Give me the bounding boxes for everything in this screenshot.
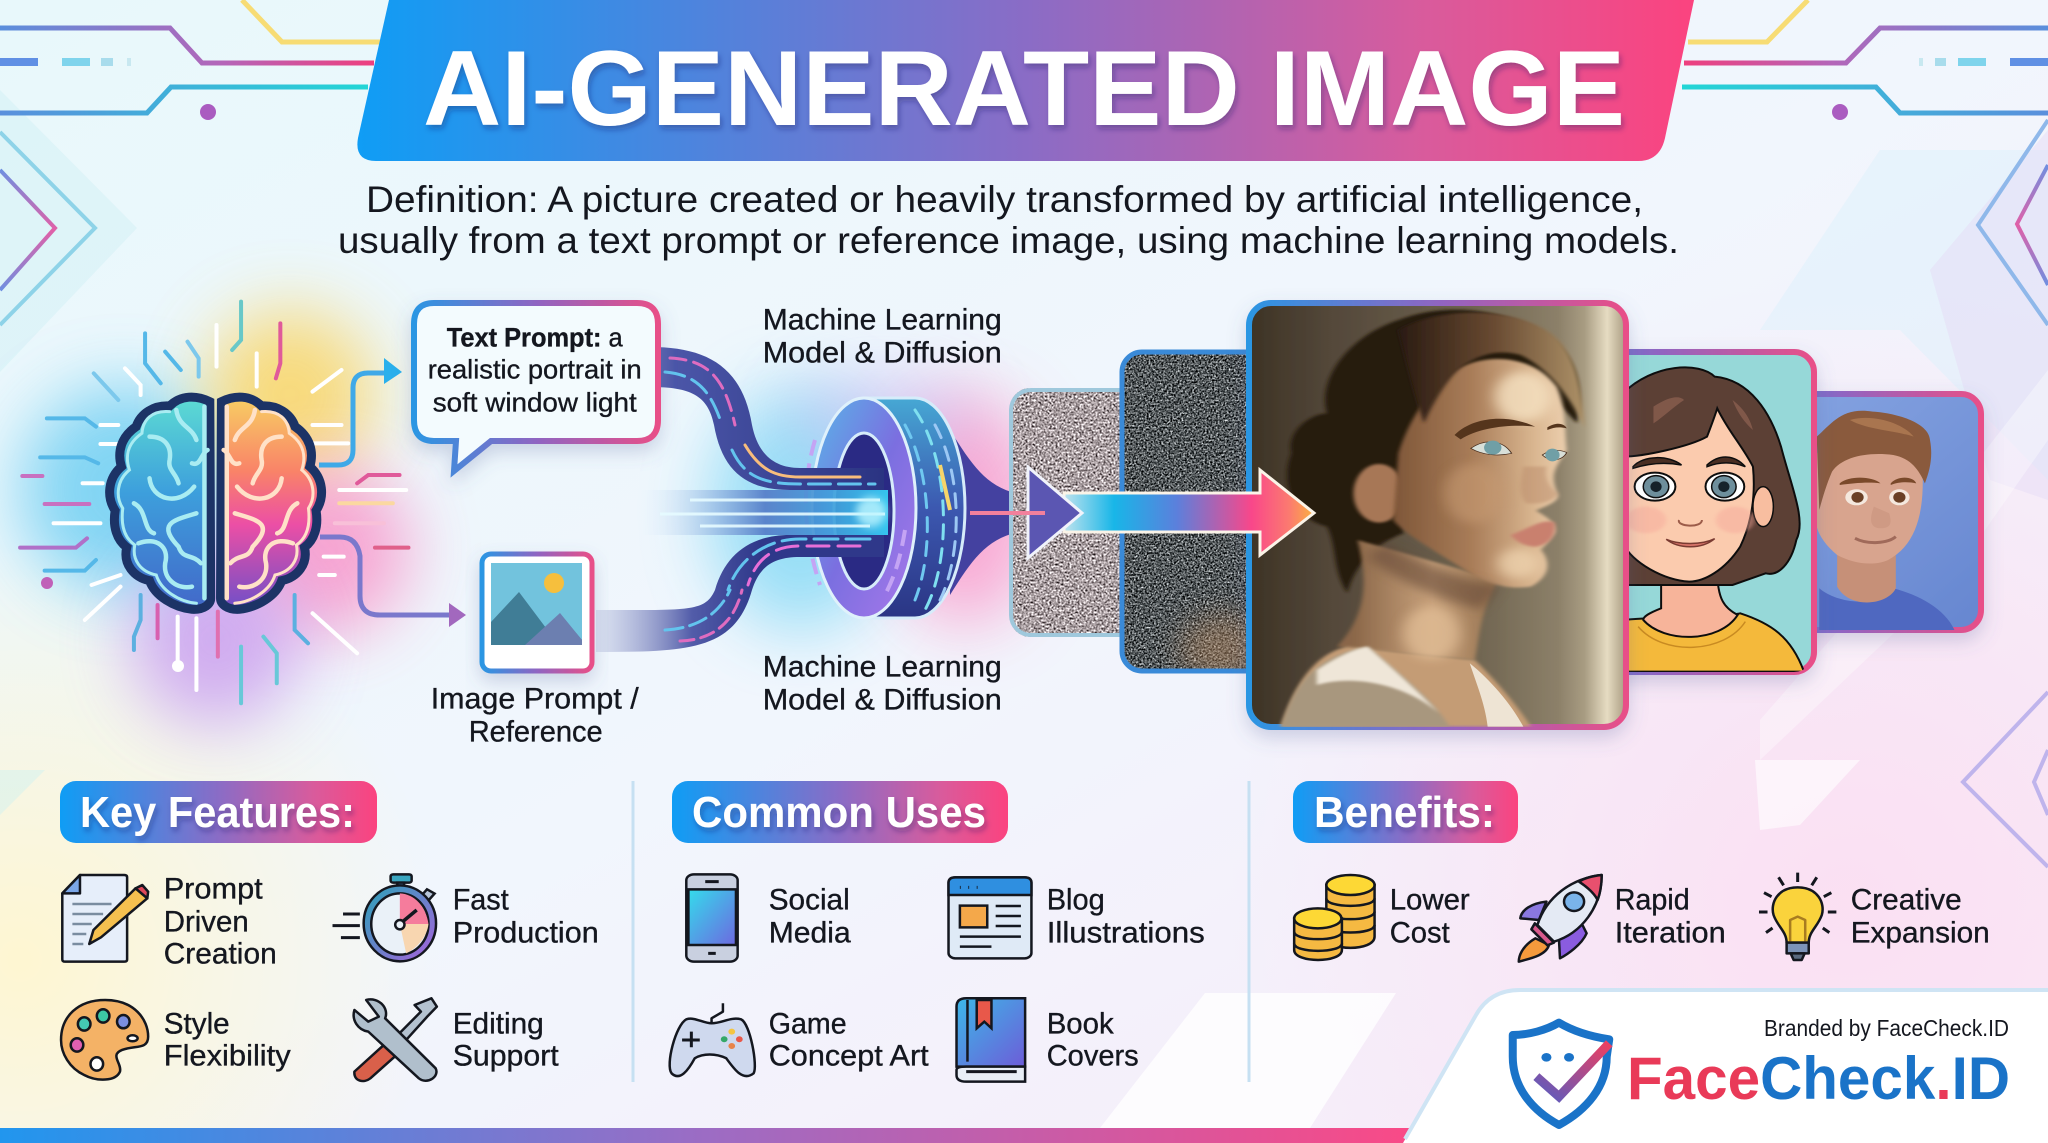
section divider one: [632, 781, 634, 1082]
text: prompt driven creation: Prompt: [164, 872, 263, 906]
text: social media: Social: [769, 884, 850, 916]
portrait chest: [1281, 647, 1531, 727]
top pipe: [650, 347, 884, 490]
branded by text: Branded by FaceCheck.ID: [1764, 1015, 2009, 1041]
text: editing support: Support: [453, 1040, 559, 1072]
arrow: brain to image prompt: [320, 537, 466, 627]
portrait front hair: [1398, 313, 1585, 428]
text: blog illustrations: Blog: [1047, 884, 1105, 916]
noise panel, dark: [1120, 350, 1246, 674]
icon: smartphone: [686, 874, 738, 962]
text: prompt driven creation: Driven: [164, 906, 249, 938]
portrait jaw light: [1498, 548, 1539, 578]
bottom pipe: [596, 535, 884, 652]
heading: key features: Key Features:: [80, 788, 355, 837]
portrait lips: [1511, 521, 1555, 547]
heading: benefits: [1293, 781, 1518, 843]
text: editing support: Editing: [453, 1008, 544, 1040]
icon: shield logo: [1513, 1023, 1609, 1125]
bubble text: Text Prompt: a: [447, 322, 624, 352]
text: rapid iteration: [1615, 884, 1726, 950]
text: lower cost: Lower: [1390, 884, 1470, 916]
text: book covers: Covers: [1047, 1040, 1139, 1072]
panel: key features: [60, 781, 599, 1081]
text: social media: [769, 884, 851, 950]
icon: document and pencil: [62, 875, 148, 962]
definition text: usually from a text prompt or reference image, using machine learning models.: [338, 220, 1679, 261]
portrait strap: [1470, 663, 1523, 727]
portrait neck light: [1403, 607, 1460, 660]
decorative circuit lines, left: [0, 0, 380, 325]
text: style flexibility: Style: [164, 1008, 230, 1040]
text: game concept art: Concept Art: [769, 1040, 929, 1072]
section divider two: [1248, 781, 1250, 1082]
text: game concept art: [769, 1008, 929, 1072]
text: lower cost: Cost: [1390, 916, 1450, 950]
icon: coin stacks: [1294, 875, 1375, 960]
text: fast production: Production: [453, 916, 599, 950]
glow around the model: [710, 380, 1040, 630]
panel: benefits: [1293, 781, 1990, 962]
decorative circuit lines, right: [1675, 0, 2048, 867]
image prompt label: Image Prompt /: [431, 682, 639, 716]
portrait back hair: [1287, 310, 1580, 593]
machine learning label, top: Model & Diffusion: [763, 336, 1002, 370]
bubble text: realistic portrait in: [428, 354, 642, 384]
text: style flexibility: [164, 1008, 291, 1072]
icon: palette: [61, 1000, 148, 1080]
image prompt label: [431, 682, 639, 748]
heading: common uses: Common Uses: [692, 788, 986, 837]
text: blog illustrations: Illustrations: [1047, 916, 1205, 950]
machine learning label, top: [763, 304, 1002, 370]
definition text: [338, 179, 1679, 261]
text: book covers: [1047, 1008, 1139, 1072]
portrait jaw shadow: [1368, 543, 1500, 610]
arrow: brain to text prompt: [319, 358, 402, 465]
image prompt card: [482, 554, 592, 671]
text: book covers: Book: [1047, 1008, 1115, 1040]
diffusion model ring: [806, 398, 965, 618]
image prompt label: Reference: [469, 716, 603, 748]
text: editing support: [453, 1008, 559, 1072]
output card: realistic portrait: [1249, 303, 1626, 727]
portrait irises: [1484, 441, 1501, 455]
portrait face: [1393, 359, 1567, 587]
wordmark: FaceCheck.ID: [1627, 1045, 2010, 1112]
text: creative expansion: Creative: [1851, 884, 1962, 916]
portrait eyes: [1471, 442, 1567, 460]
text: social media: Media: [769, 916, 851, 950]
portrait brow: [1454, 419, 1567, 439]
text: creative expansion: Expansion: [1851, 916, 1990, 950]
text: style flexibility: Flexibility: [164, 1040, 291, 1072]
portrait ear: [1353, 464, 1404, 523]
text: fast production: [453, 884, 599, 950]
icon: wrench and screwdriver: [354, 998, 437, 1081]
bottom gradient bar: [0, 1128, 1410, 1143]
machine learning label, bottom: Machine Learning: [763, 650, 1002, 684]
icon: blog page: [949, 877, 1031, 958]
panel: common uses: [670, 781, 1205, 1082]
machine learning label, bottom: [763, 650, 1002, 716]
icon: book: [957, 998, 1025, 1082]
heading: benefits: Benefits:: [1314, 788, 1495, 837]
panel: logo: [1403, 990, 2048, 1143]
bubble text: soft window light: [433, 388, 637, 418]
output card: cartoon portrait: [1629, 349, 1824, 690]
icon: game controller: [670, 1003, 755, 1076]
text: fast production: Fast: [453, 884, 509, 916]
text: game concept art: Game: [769, 1008, 847, 1040]
portrait nose shadow: [1521, 467, 1558, 504]
machine learning label, top: Machine Learning: [763, 304, 1002, 336]
text prompt speech bubble: [414, 303, 658, 471]
text: rapid iteration: Rapid: [1615, 884, 1690, 916]
bubble text: [428, 322, 642, 418]
definition text: Definition: A picture created or heavily transformed by artificial intelligence,: [366, 179, 1643, 220]
portrait forehead light: [1495, 372, 1551, 422]
portrait neck: [1337, 540, 1498, 660]
text: lower cost: [1390, 884, 1470, 950]
text: prompt driven creation: Creation: [164, 938, 277, 970]
icon: rocket: [1519, 875, 1602, 962]
central flow beam: [640, 490, 888, 535]
portrait top highlight: [1317, 647, 1439, 713]
text: prompt driven creation: [164, 872, 277, 970]
icon: light bulb: [1759, 873, 1836, 960]
title banner: [357, 0, 1694, 161]
portrait iris right: [1545, 449, 1560, 461]
title: AI-GENERATED IMAGE: [423, 28, 1625, 148]
portrait cheek light: [1441, 464, 1492, 523]
output card: 3D avatar: [1817, 391, 1992, 648]
brain glow and rays: [20, 302, 410, 725]
text: blog illustrations: [1047, 884, 1205, 950]
machine learning label, bottom: Model & Diffusion: [763, 684, 1002, 716]
text: rapid iteration: Iteration: [1615, 916, 1726, 950]
arrow: main gradient arrow: [1064, 470, 1314, 555]
text: creative expansion: [1851, 884, 1990, 950]
arrow: dark purple model output: [970, 467, 1082, 558]
portrait white top: [1281, 647, 1449, 727]
icon: brain: [110, 397, 322, 609]
icon: stopwatch: [333, 874, 436, 961]
noise panel, light: [1009, 388, 1120, 637]
